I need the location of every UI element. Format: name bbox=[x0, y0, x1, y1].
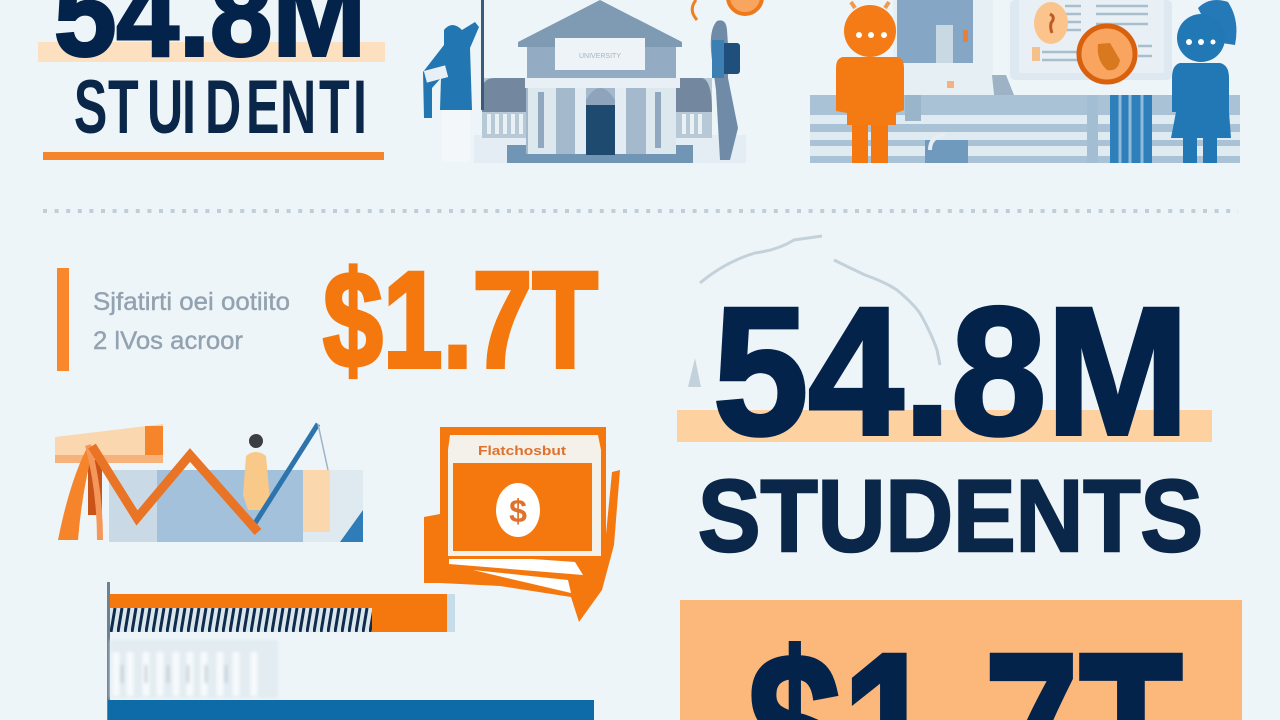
dollar coin bbox=[496, 483, 540, 537]
orange coin cluster at top bbox=[692, 0, 762, 20]
illustration: university building with students bbox=[423, 0, 746, 163]
illustration: classroom with students and coin bbox=[810, 0, 1240, 163]
decorative sketch lines bbox=[688, 236, 940, 387]
open book panel bbox=[1010, 0, 1172, 80]
student left with pole bbox=[423, 0, 484, 162]
big number: $1.7T: $1.7T bbox=[323, 244, 598, 397]
dollar coin: $ bbox=[509, 493, 527, 529]
panel: right headline stats bbox=[677, 236, 1212, 573]
label: STUDENTI: STUIDENTI bbox=[74, 65, 367, 150]
icon: stack of banknotes bbox=[424, 427, 620, 622]
highlight band bbox=[677, 410, 1212, 442]
small orange badge bbox=[1034, 2, 1068, 44]
illustration: zigzag debt chart bbox=[55, 424, 363, 542]
blue bar bbox=[108, 700, 594, 720]
building bbox=[474, 0, 746, 163]
blue figure bbox=[1171, 0, 1236, 163]
bar chart bbox=[107, 582, 594, 720]
banknote label: Flatchosbut bbox=[478, 443, 567, 458]
pale bar bbox=[110, 640, 278, 698]
orange figure bbox=[836, 2, 904, 163]
label: STUDENTS: STUDENTS bbox=[698, 459, 1203, 573]
orange accent bar bbox=[57, 268, 69, 371]
description text: Sjfatirti oei ootiito bbox=[93, 288, 290, 316]
dotted divider bbox=[43, 209, 1238, 213]
panel: left debt stat bbox=[57, 244, 598, 397]
description text: 2 lVos acroor bbox=[93, 327, 243, 355]
student right with backpack bbox=[711, 20, 740, 160]
building: UNIVERSITY bbox=[579, 53, 621, 60]
bench stripes bbox=[810, 95, 1240, 163]
axis bbox=[107, 582, 110, 720]
panel: top-left students stat bbox=[38, 0, 385, 160]
highlight band bbox=[38, 42, 385, 62]
basket bbox=[925, 135, 968, 163]
orange underline bbox=[43, 152, 384, 160]
whiteboard screen bbox=[893, 0, 1014, 95]
coin bbox=[1079, 26, 1135, 82]
description text bbox=[93, 288, 290, 355]
orange bar bbox=[110, 594, 455, 632]
big number: 54.8M: 54.8M bbox=[713, 269, 1189, 473]
